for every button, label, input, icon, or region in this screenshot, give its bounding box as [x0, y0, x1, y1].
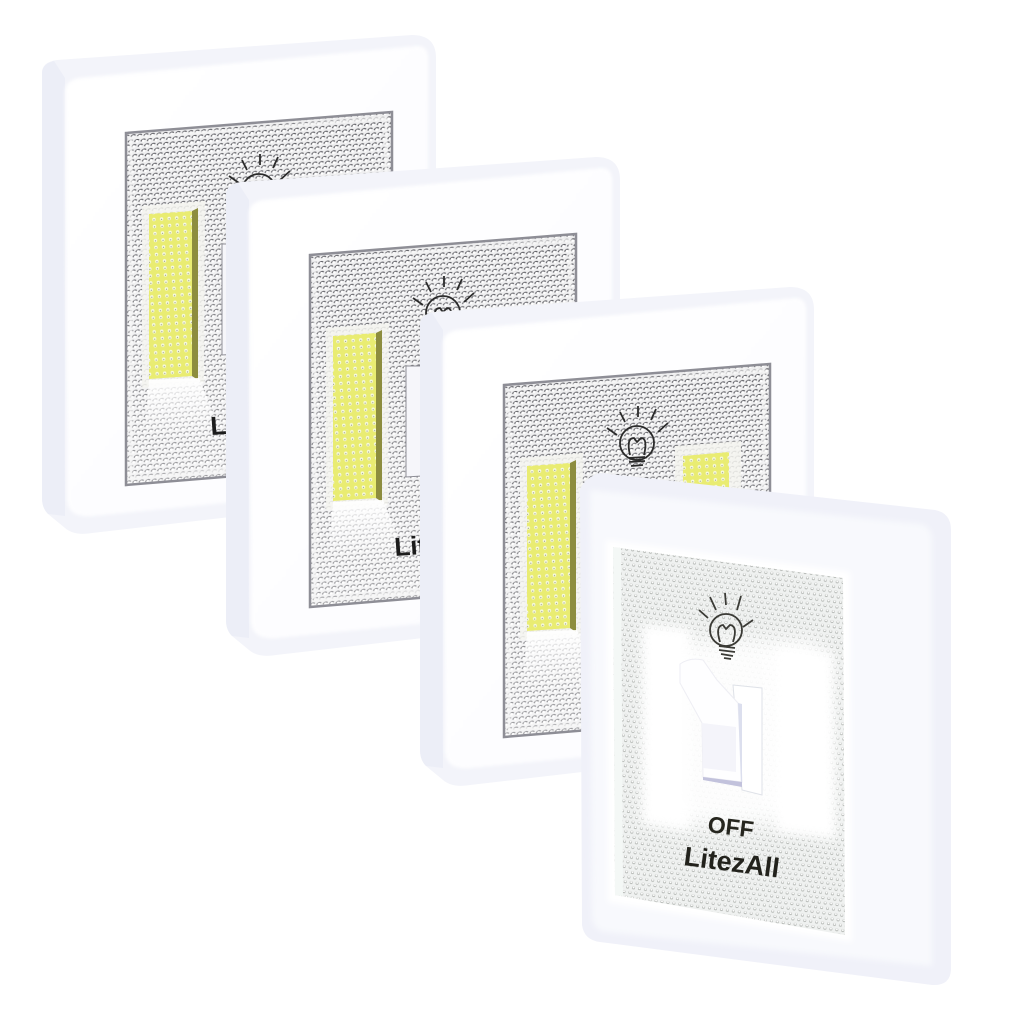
toggle side shade: [738, 703, 742, 786]
window inner band 3: [509, 370, 764, 730]
switch light 1 (back): [42, 35, 436, 534]
bulb icon 2: [413, 276, 474, 336]
toggle lever: [680, 659, 742, 782]
housing face 4: [590, 490, 932, 966]
housing face 3: [443, 298, 806, 768]
window frame 1: [126, 112, 392, 485]
window lighten 3: [504, 364, 770, 737]
housing 3: [420, 287, 814, 786]
housing left side 2: [226, 183, 249, 638]
LED reflection 2: [328, 500, 398, 562]
window lighten 1: [126, 112, 392, 485]
housing face 2: [249, 168, 612, 638]
bulb icon 3: [607, 406, 668, 466]
brand logo: LitezAll: [682, 841, 781, 883]
light glow: [613, 547, 836, 896]
window frame 3: [504, 364, 770, 737]
bulb icon 4: [699, 593, 753, 659]
housing 1: [42, 35, 436, 534]
LED strip 2: [333, 333, 376, 501]
LED strip 3: [527, 463, 570, 631]
housing left side 1: [42, 61, 65, 516]
window frame 2: [310, 234, 576, 607]
switch light 2: [226, 157, 620, 656]
switch light 4 (front, lit): [580, 473, 951, 985]
toggle slot 1: [222, 244, 238, 355]
housing left side 3: [420, 313, 443, 768]
LED shadow 1: [192, 208, 198, 380]
switch light 3: [420, 287, 814, 786]
toggle shadow: [703, 777, 742, 787]
toggle slot: [733, 685, 762, 795]
brand text 2: LitezAll: [393, 526, 488, 562]
LED reflection 3: [522, 630, 592, 692]
lit window: [613, 547, 845, 935]
window 2: [310, 234, 576, 607]
toggle inner shade: [702, 723, 736, 772]
brand text 1: LitezAll: [209, 405, 304, 441]
LED shadow 3: [570, 460, 576, 632]
LED surround 3: [520, 453, 583, 640]
second LED strip 3: [683, 452, 729, 500]
window glow: [606, 540, 852, 942]
window 1: [126, 112, 392, 485]
bulb icon 1: [229, 154, 290, 214]
window 3: [504, 364, 770, 737]
housing 4: [580, 473, 951, 985]
LED surround 1: [142, 201, 205, 388]
window lighten 2: [310, 234, 576, 607]
second LED surround 3: [675, 441, 741, 500]
housing face 1: [65, 46, 428, 516]
LED shadow 2: [376, 330, 382, 502]
window inner band 2: [315, 240, 570, 600]
housing 2: [226, 157, 620, 656]
LED strip 1: [149, 211, 192, 379]
toggle slot 2: [406, 366, 422, 477]
LED surround 2: [326, 323, 389, 510]
OFF label: OFF: [706, 811, 755, 843]
LED reflection 1: [144, 378, 214, 440]
window inner band 1: [131, 118, 386, 478]
